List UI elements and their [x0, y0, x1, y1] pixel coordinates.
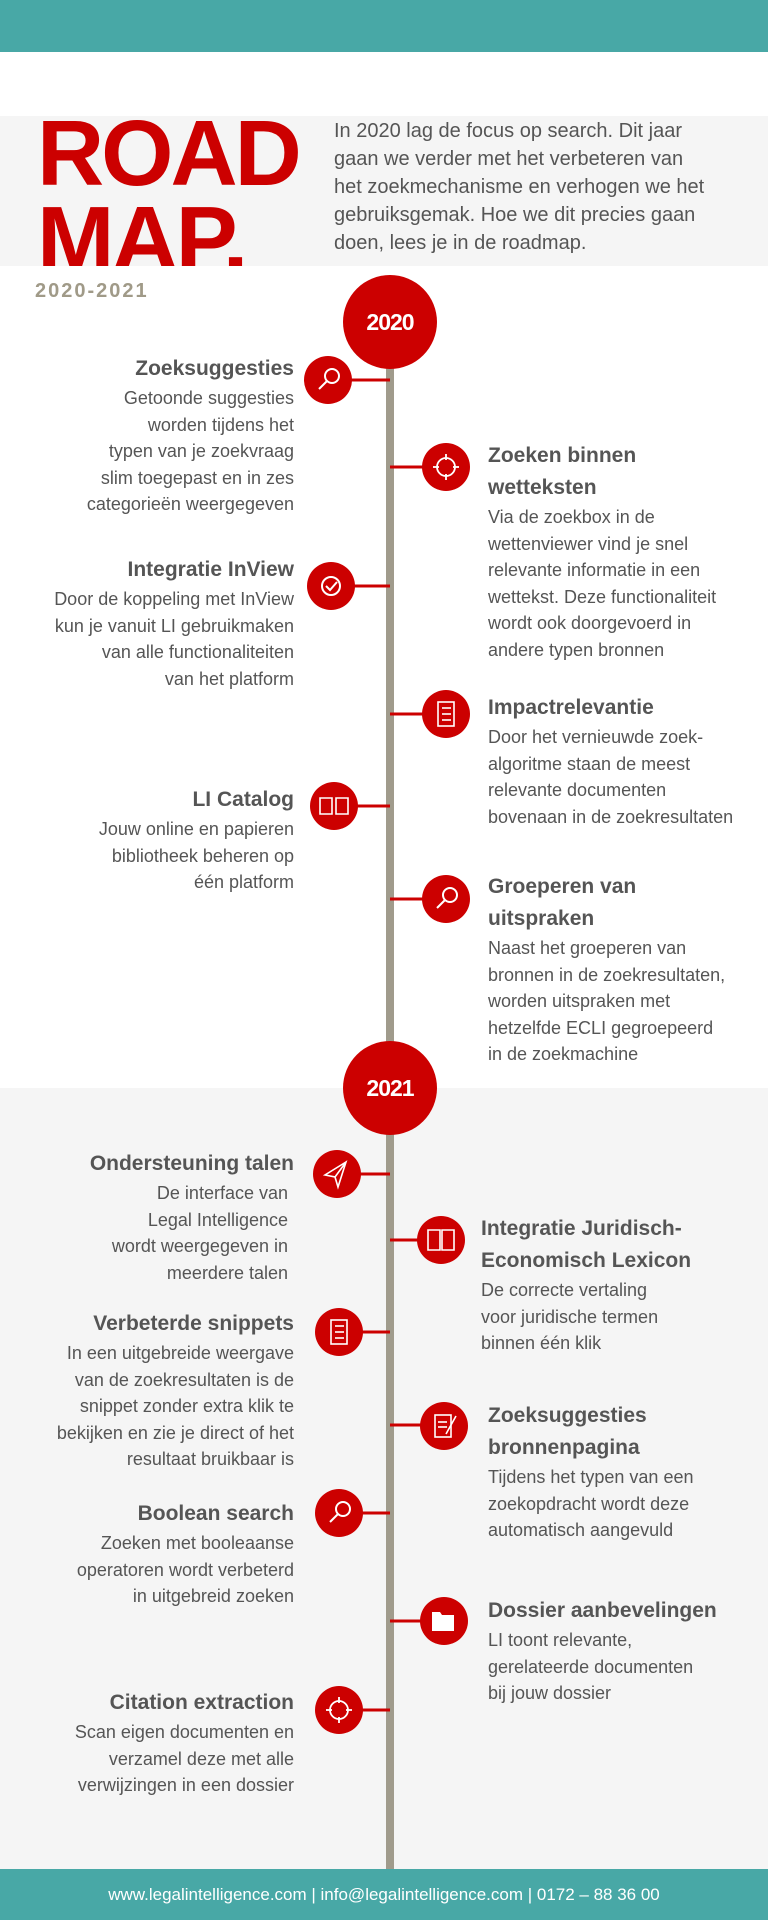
item: Zoeken binnen wetteksten: Via de zoekbox in de: [488, 507, 655, 527]
item: Verbeterde snippets: In een uitgebreide weergave: [67, 1343, 294, 1363]
item: Impactrelevantie: [488, 696, 733, 826]
item: Zoeksuggesties bronnenpagina: Tijdens het typen van een: [488, 1467, 693, 1487]
item: Zoeken binnen wetteksten: wettenviewer vind je snel: [488, 534, 688, 554]
item: Dossier aanbevelingen: Dossier aanbevelingen: [488, 1599, 717, 1622]
item: Dossier aanbevelingen: bij jouw dossier: [488, 1683, 611, 1703]
item: Citation extraction: Scan eigen documenten en: [75, 1722, 294, 1742]
item: Zoeksuggesties: Zoeksuggesties: [135, 357, 294, 380]
item: Zoeken binnen wetteksten: wordt ook doorgevoerd in: [488, 613, 691, 633]
item: Integratie Juridisch-Economisch Lexicon: Economisch Lexicon: [481, 1249, 691, 1272]
icon: folder (Dossier aanbevelingen): [420, 1597, 468, 1645]
subtitle years: 2020-2021: [35, 280, 149, 302]
item: Boolean search: Zoeken met booleaanse: [101, 1533, 294, 1553]
item: Zoeken binnen wetteksten: relevante informatie in een: [488, 560, 700, 580]
item: Zoeksuggesties bronnenpagina: Zoeksuggesties: [488, 1404, 647, 1427]
icon: target (Citation extraction): [315, 1686, 363, 1734]
icon: paper plane (Ondersteuning talen): [313, 1150, 361, 1198]
intro text: [334, 120, 704, 254]
item: Integratie Juridisch-Economisch Lexicon: De correcte vertaling: [481, 1280, 647, 1300]
item: Verbeterde snippets: bekijken en zie je direct of het: [57, 1422, 294, 1442]
icon: search (Groeperen van uitspraken): [422, 875, 470, 923]
item: Boolean search: in uitgebreid zoeken: [133, 1586, 294, 1606]
item: Groeperen van uitspraken: [488, 875, 725, 1064]
item: Impactrelevantie: Impactrelevantie: [488, 696, 654, 719]
item: Zoeksuggesties bronnenpagina: zoekopdracht wordt deze: [488, 1494, 689, 1514]
item: Zoeksuggesties: worden tijdens het: [148, 414, 294, 434]
header grey band: [0, 116, 768, 266]
intro text: In 2020 lag de focus op search. Dit jaar: [334, 120, 682, 142]
item: Citation extraction: verwijzingen in een dossier: [78, 1775, 294, 1795]
icon: check (Integratie InView): [307, 562, 355, 610]
item: Zoeken binnen wetteksten: wetteksten: [488, 476, 597, 499]
top teal bar: [0, 0, 768, 52]
item: Ondersteuning talen: wordt weergegeven in: [112, 1236, 288, 1256]
bottom grey section: [0, 1088, 768, 1870]
item: Ondersteuning talen: Legal Intelligence: [148, 1210, 288, 1230]
item: Citation extraction: Citation extraction: [110, 1691, 294, 1714]
item: Impactrelevantie: relevante documenten: [488, 780, 666, 800]
item: Impactrelevantie: Door het vernieuwde zoek-: [488, 727, 703, 747]
year circle 2020: [343, 275, 437, 369]
item: Ondersteuning talen: De interface van: [157, 1183, 288, 1203]
item: Zoeksuggesties bronnenpagina: [488, 1404, 693, 1540]
item: Verbeterde snippets: snippet zonder extra klik te: [80, 1396, 294, 1416]
item: Verbeterde snippets: resultaat bruikbaar is: [127, 1449, 294, 1469]
item: Ondersteuning talen: [90, 1152, 294, 1282]
item: Citation extraction: verzamel deze met alle: [109, 1748, 294, 1768]
item: Ondersteuning talen: meerdere talen: [167, 1262, 288, 1282]
item: LI Catalog: LI Catalog: [192, 788, 294, 811]
item: Integratie InView: van alle functionaliteiten: [102, 642, 294, 662]
item: Groeperen van uitspraken: bronnen in de zoekresultaten,: [488, 964, 725, 984]
footer: www.legalintelligence.com | info@legalintelligence.com | 0172 – 88 36 00: [108, 1885, 660, 1904]
item: Integratie InView: van het platform: [165, 668, 294, 688]
item: Integratie InView: Door de koppeling met InView: [54, 589, 294, 609]
item: Integratie InView: kun je vanuit LI gebruikmaken: [55, 616, 294, 636]
item: Groeperen van uitspraken: hetzelfde ECLI gegroepeerd: [488, 1018, 713, 1038]
item: Integratie Juridisch-Economisch Lexicon: [481, 1217, 691, 1353]
item: Zoeken binnen wetteksten: andere typen bronnen: [488, 640, 664, 660]
item: Dossier aanbevelingen: gerelateerde documenten: [488, 1656, 693, 1676]
intro text: doen, lees je in de roadmap.: [334, 232, 586, 254]
item: Verbeterde snippets: van de zoekresultaten is de: [75, 1370, 294, 1390]
item: Dossier aanbevelingen: LI toont relevante,: [488, 1630, 632, 1650]
timeline line: [386, 360, 394, 1870]
item: Integratie Juridisch-Economisch Lexicon: Integratie Juridisch-: [481, 1217, 682, 1240]
item: Citation extraction: [75, 1691, 294, 1795]
item: Zoeksuggesties: typen van je zoekvraag: [109, 441, 294, 461]
connectors: [340, 380, 440, 1710]
item: Boolean search: [77, 1502, 294, 1606]
item: Zoeken binnen wetteksten: [488, 444, 716, 660]
icon: search (Boolean search): [315, 1489, 363, 1537]
icon: list (Impactrelevantie): [422, 690, 470, 738]
item: Integratie Juridisch-Economisch Lexicon: voor juridische termen: [481, 1306, 658, 1326]
item: Verbeterde snippets: [57, 1312, 294, 1469]
item: Zoeken binnen wetteksten: Zoeken binnen: [488, 444, 636, 467]
year circle 2021: 2021: [366, 1075, 415, 1101]
icon: search (Zoeksuggesties): [304, 356, 352, 404]
title: ROAD MAP.: [37, 110, 299, 266]
footer: [0, 1869, 768, 1920]
item: Groeperen van uitspraken: Naast het groeperen van: [488, 938, 686, 958]
item: Verbeterde snippets: Verbeterde snippets: [93, 1312, 294, 1335]
item: Groeperen van uitspraken: Groeperen van: [488, 875, 636, 898]
icon: list (Verbeterde snippets): [315, 1308, 363, 1356]
item: LI Catalog: Jouw online en papieren: [99, 819, 294, 839]
item: Impactrelevantie: bovenaan in de zoekresultaten: [488, 806, 733, 826]
item: Integratie Juridisch-Economisch Lexicon: binnen één klik: [481, 1333, 601, 1353]
item: Zoeksuggesties: categorieën weergegeven: [87, 494, 294, 514]
item: Zoeksuggesties bronnenpagina: automatisch aangevuld: [488, 1520, 673, 1540]
intro text: gebruiksgemak. Hoe we dit precies gaan: [334, 204, 695, 226]
item: Integratie InView: Integratie InView: [128, 558, 294, 581]
icon: book (Integratie Juridisch-Economisch Lexicon): [417, 1216, 465, 1264]
item: Groeperen van uitspraken: worden uitspraken met: [488, 991, 670, 1011]
item: Zoeksuggesties: Getoonde suggesties: [124, 388, 294, 408]
intro text: gaan we verder met het verbeteren van: [334, 148, 683, 170]
item: Zoeksuggesties bronnenpagina: bronnenpagina: [488, 1436, 640, 1459]
icon: target (Zoeken binnen wetteksten): [422, 443, 470, 491]
icon: notepad (Zoeksuggesties bronnenpagina): [420, 1402, 468, 1450]
item: LI Catalog: bibliotheek beheren op: [112, 846, 294, 866]
item: Ondersteuning talen: Ondersteuning talen: [90, 1152, 294, 1175]
year circle 2020: 2020: [366, 309, 414, 335]
item: Boolean search: Boolean search: [138, 1502, 294, 1525]
intro text: het zoekmechanisme en verhogen we het: [334, 176, 704, 198]
item: LI Catalog: [99, 788, 294, 892]
item: Impactrelevantie: algoritme staan de meest: [488, 754, 690, 774]
item: Integratie InView: [54, 558, 294, 689]
item: Zoeken binnen wetteksten: wettekst. Deze functionaliteit: [488, 586, 716, 606]
year circle 2021: [343, 1041, 437, 1135]
item: LI Catalog: één platform: [194, 872, 294, 892]
item: Groeperen van uitspraken: uitspraken: [488, 907, 594, 930]
item: Groeperen van uitspraken: in de zoekmachine: [488, 1044, 638, 1064]
item: Zoeksuggesties: slim toegepast en in zes: [101, 468, 294, 488]
item: Boolean search: operatoren wordt verbeterd: [77, 1560, 294, 1580]
item: Dossier aanbevelingen: [488, 1599, 717, 1703]
icon: book (LI Catalog): [310, 782, 358, 830]
item: Zoeksuggesties: [87, 357, 294, 514]
